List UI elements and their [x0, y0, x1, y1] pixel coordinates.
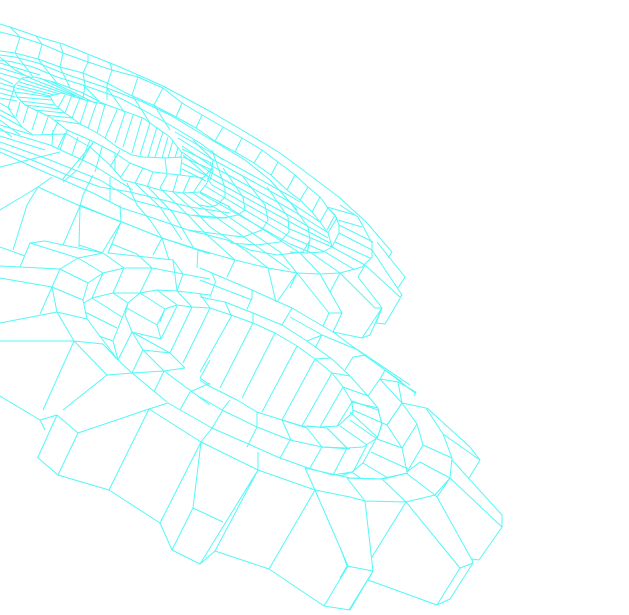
lower gear central ring: [200, 297, 410, 475]
upper gear wireframe: [0, 24, 405, 338]
upper gear outer band: [0, 24, 392, 258]
upper gear ring lines: [0, 53, 297, 210]
lower gear hub ring left: [63, 244, 210, 410]
lower gear right end: [340, 370, 502, 610]
lower gear wireframe: [0, 241, 502, 610]
upper gear concentric rings: [0, 130, 372, 274]
upper gear radial lines: [127, 132, 373, 274]
upper gear lower hub wall: [8, 85, 213, 193]
upper gear lower teeth: [0, 143, 405, 338]
lower gear bottom teeth: [37, 397, 408, 610]
upper gear hub hole top: [13, 77, 182, 158]
upper gear hub wall hatching: [58, 95, 178, 158]
lower gear left teeth: [0, 241, 210, 420]
